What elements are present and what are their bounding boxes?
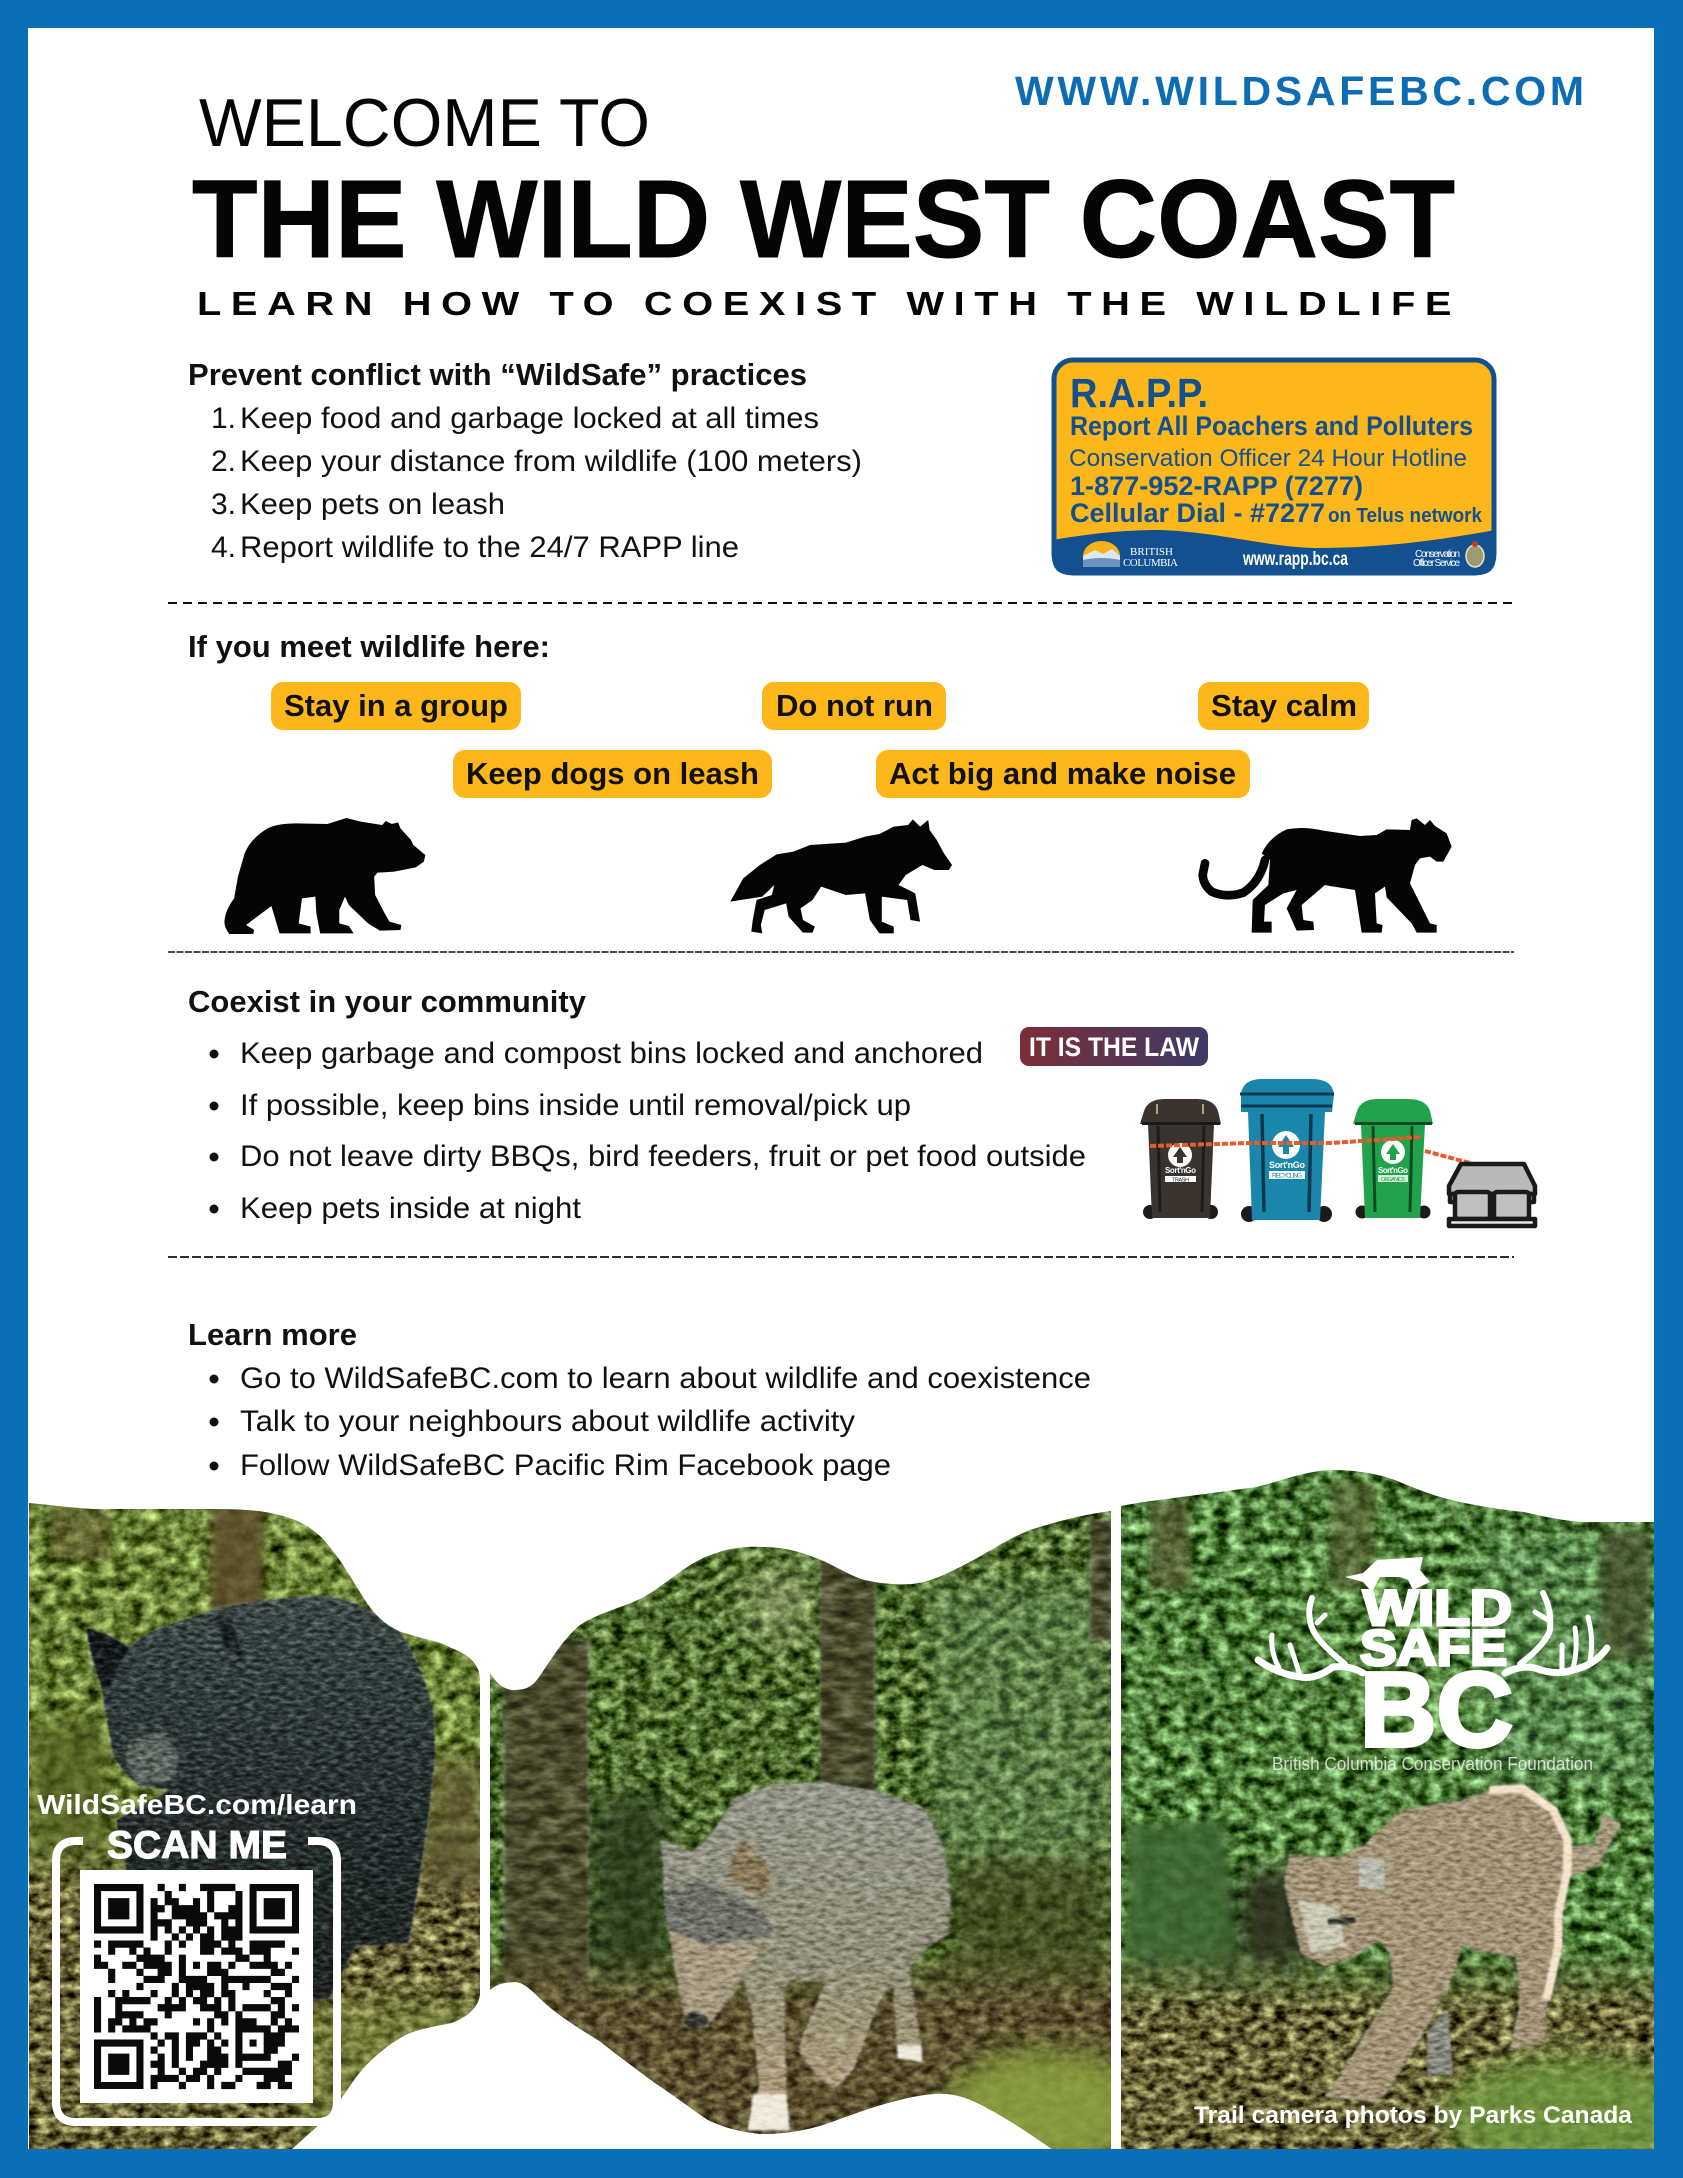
pill: stay in a group (271, 682, 521, 730)
pill: act big: Act big and make noise (889, 756, 1236, 791)
black trash bin: TRASH (1172, 1178, 1189, 1184)
section: coexist (188, 984, 1086, 1225)
phone number: 1-877-952-RAPP (7277) (1070, 471, 1363, 501)
RAPP heading: R.A.P.P. (1070, 370, 1208, 416)
bullet list: If possible, keep bins inside until removal/pick up (240, 1089, 911, 1122)
bullet list: Talk to your neighbours about wildlife activity (240, 1405, 855, 1438)
black trash bin (1140, 1099, 1221, 1219)
numbered list: Report wildlife to the 24/7 RAPP line (240, 531, 739, 564)
bullet list: Go to WildSafeBC.com to learn about wildlife and coexistence (240, 1362, 1091, 1395)
photo: black bear (29, 1495, 485, 2155)
blue recycling bin (1240, 1079, 1334, 1222)
green organics bin: ORGANICS (1381, 1177, 1405, 1183)
logo foundation name: British Columbia Conservation Foundation (1272, 1754, 1593, 1774)
bear body (86, 1595, 436, 2000)
conservation officer badge (1413, 541, 1484, 569)
conservation officer badge: Conservation (1415, 549, 1460, 560)
pill: act big (876, 750, 1250, 798)
BC logo: BRITISH (1130, 546, 1173, 558)
conservation officer badge: Officer Service (1413, 558, 1460, 569)
QR call to action (37, 1789, 357, 2122)
logo WILD: WILD (1363, 1580, 1512, 1636)
numbered list: 1. (211, 402, 236, 435)
locked food box (1449, 1164, 1535, 1226)
it is the law badge: IT IS THE LAW (1029, 1032, 1199, 1062)
section: prevent conflict (188, 357, 862, 564)
numbered list (211, 402, 862, 564)
green organics bin (1353, 1099, 1433, 1218)
pill: keep dogs on leash: Keep dogs on leash (466, 756, 759, 791)
QR code (80, 1870, 313, 2103)
logo antlers (1258, 1593, 1607, 1678)
bullet list: Keep pets inside at night (240, 1192, 582, 1225)
numbered list: Keep your distance from wildlife (100 meters) (240, 445, 862, 478)
numbered list: 3. (211, 488, 236, 521)
BC logo: COLUMBIA (1123, 557, 1178, 569)
heading: meet wildlife: If you meet wildlife here: (188, 629, 550, 664)
pill: stay in a group: Stay in a group (284, 688, 508, 723)
wolf body (660, 1782, 951, 2131)
numbered list: Keep food and garbage locked at all times (240, 402, 819, 435)
pill: keep dogs on leash (453, 750, 772, 798)
section: learn more (188, 1317, 1091, 1482)
pill: do not run: Do not run (776, 688, 933, 723)
subtitle: LEARN HOW TO COEXIST WITH THE WILDLIFE (197, 285, 1461, 322)
locked bins illustration (1140, 1079, 1535, 1226)
heading: Prevent conflict with “WildSafe” practices (188, 357, 807, 392)
blue wave footer (1052, 530, 1496, 575)
BC logo (1083, 541, 1178, 569)
blue recycling bin: Sort'nGo (1269, 1160, 1306, 1170)
advice pills (271, 682, 1369, 798)
hotline label: Conservation Officer 24 Hour Hotline (1069, 445, 1467, 472)
icon: bear silhouette (224, 818, 425, 934)
pill: do not run (762, 682, 946, 730)
sign background (1054, 360, 1494, 573)
main title: THE WILD WEST COAST (192, 158, 1455, 281)
photo: cougar (1121, 1465, 1683, 2175)
website url: WWW.WILDSAFEBC.COM (1015, 68, 1584, 114)
scan frame (56, 1841, 337, 2122)
icon: wolf silhouette (730, 819, 952, 933)
icon: cougar silhouette (1203, 818, 1452, 933)
cellular dial: Cellular Dial - #7277 (1070, 498, 1325, 528)
bullet list: Do not leave dirty BBQs, bird feeders, fruit or pet food outside (240, 1140, 1086, 1173)
sign tagline: Report All Poachers and Polluters (1070, 411, 1473, 441)
mossy log (1127, 1820, 1243, 1990)
logo BC: BC (1360, 1651, 1513, 1769)
RAPP hotline sign (1052, 360, 1496, 575)
learn url: WildSafeBC.com/learn (37, 1789, 357, 1820)
logo cat (1345, 1557, 1430, 1592)
RAPP web address: www.rapp.bc.ca (1242, 549, 1348, 570)
blue recycling bin: RECYCLING (1272, 1172, 1302, 1180)
bullet list: Keep garbage and compost bins locked and anchored (240, 1037, 983, 1070)
photo: wolf (490, 1505, 1145, 2170)
scan me: SCAN ME (107, 1824, 287, 1867)
bullet list (210, 1362, 1091, 1482)
heading: Coexist in your community (188, 984, 587, 1019)
numbered list: 2. (211, 445, 236, 478)
pill: stay calm (1198, 682, 1369, 730)
numbered list: Keep pets on leash (240, 488, 505, 521)
pill: stay calm: Stay calm (1211, 688, 1357, 723)
logo SAFE: SAFE (1360, 1620, 1507, 1676)
green organics bin: Sort'nGo (1378, 1166, 1408, 1175)
black trash bin: Sort'nGo (1165, 1166, 1196, 1175)
bullet list (210, 1037, 1086, 1225)
tree trunks (504, 1520, 1112, 2020)
telus note: on Telus network (1328, 505, 1483, 527)
welcome line: WELCOME TO (199, 85, 650, 161)
numbered list: 4. (211, 531, 236, 564)
cougar body (1284, 1788, 1622, 2103)
WildSafe BC logo (1258, 1557, 1607, 1774)
orange chain (1150, 1137, 1470, 1163)
title block (192, 85, 1461, 322)
photo credit: Trail camera photos by Parks Canada (1194, 2102, 1633, 2129)
bullet list: Follow WildSafeBC Pacific Rim Facebook page (240, 1449, 891, 1482)
heading: Learn more (188, 1317, 357, 1352)
